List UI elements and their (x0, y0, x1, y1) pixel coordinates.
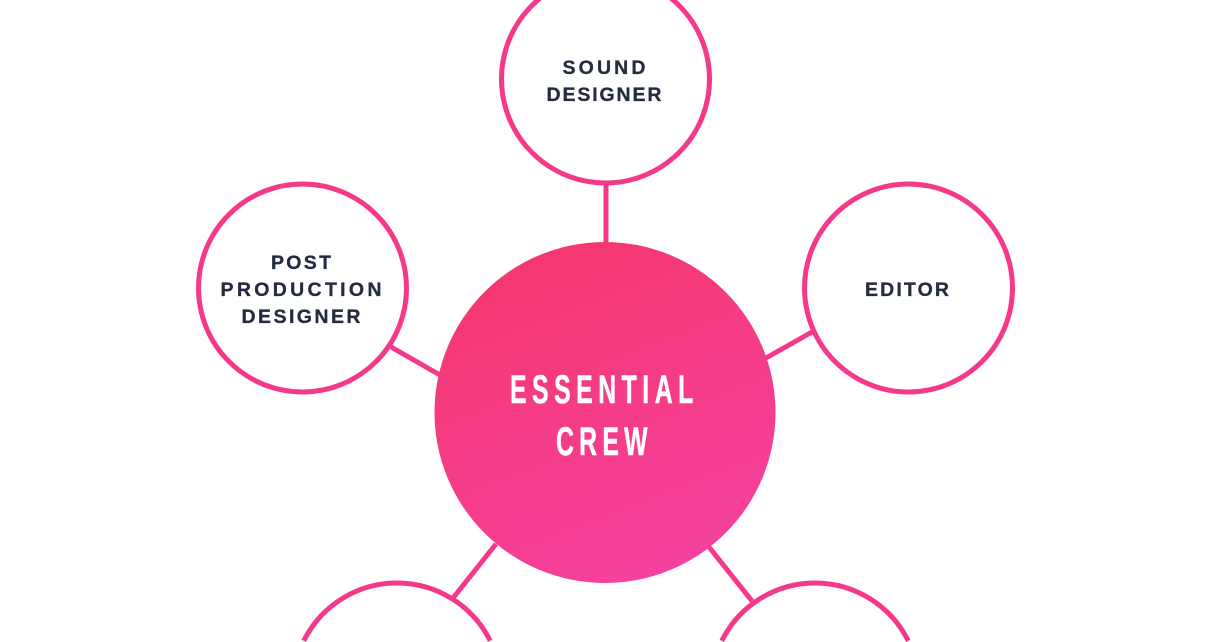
heading: essential: ESSENTIAL (510, 368, 699, 413)
node: post production designer: POST (271, 252, 331, 274)
connector: sound designer (604, 184, 608, 244)
node: post production designer: DESIGNER (242, 306, 360, 328)
node: sound designer (502, 0, 710, 183)
node: editor: EDITOR (865, 279, 949, 301)
heading: crew: CREW (556, 420, 653, 465)
node: lower left (cropped) (304, 583, 490, 641)
connector: editor (766, 332, 812, 358)
node: sound designer: SOUND (562, 57, 646, 79)
connector: post production designer (391, 347, 440, 375)
node: post production designer (198, 184, 406, 392)
central circle: essential crew (434, 242, 776, 583)
connector: lower left (453, 544, 496, 598)
node: editor (804, 184, 1012, 392)
node: lower right (cropped) (722, 583, 908, 641)
node: post production designer: PRODUCTION (220, 279, 382, 301)
connector: lower right (709, 547, 752, 601)
node: sound designer: DESIGNER (546, 84, 662, 106)
